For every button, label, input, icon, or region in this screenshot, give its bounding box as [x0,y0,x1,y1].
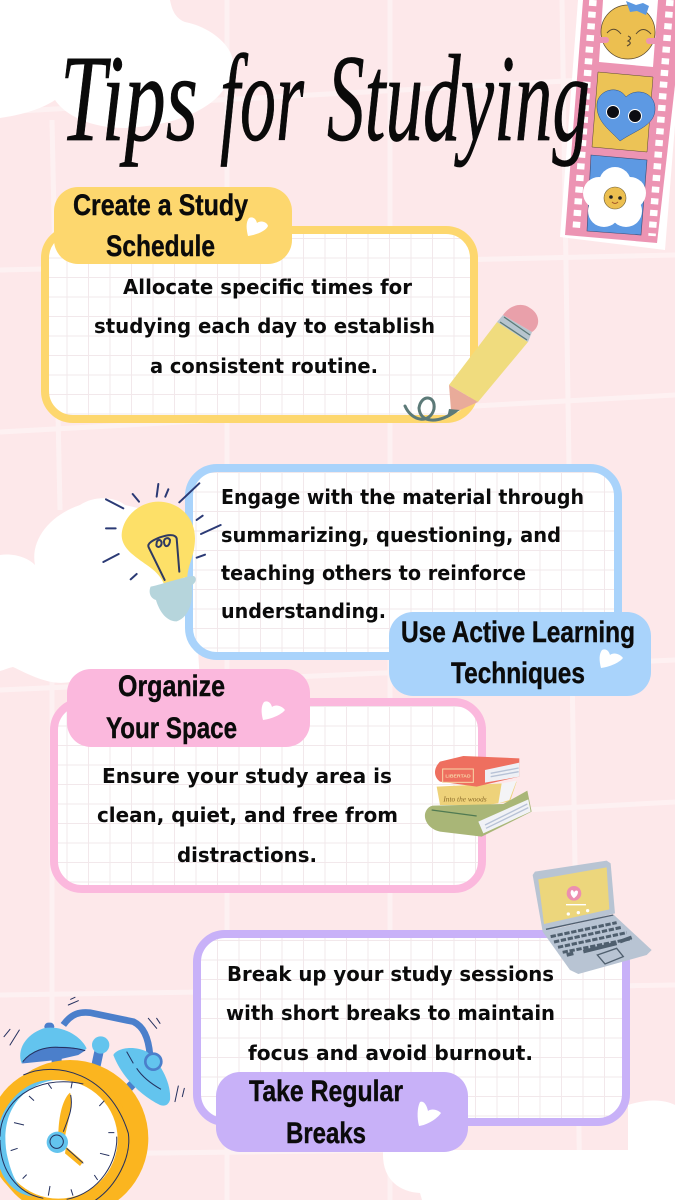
label: organize your space [67,669,310,747]
body text: teaching others to reinforce [221,561,526,585]
icon: stack of books [425,756,532,837]
body text: Engage with the material through [221,485,584,509]
body text: understanding. [221,599,386,623]
icon: alarm clock [0,997,184,1200]
sprocket holes [576,0,670,236]
icon: light bulb [103,483,221,621]
body text [221,485,584,623]
yellow book: Into the woods [442,794,487,803]
panel: organize your space [54,669,482,889]
cloud: top left [0,0,233,128]
panel: create a study schedule [45,187,474,419]
body text [97,764,398,867]
icon: pencil [405,305,538,420]
label: create a study schedule: Create a Study [73,189,248,222]
body text [226,962,555,1065]
film strip sticker [560,0,675,250]
panel: take regular breaks [197,934,626,1152]
body text: focus and avoid burnout. [248,1041,533,1065]
left bell [20,1023,87,1072]
body text: clean, quiet, and free from [97,803,398,827]
label: take regular breaks [216,1072,468,1152]
icon: laptop [533,861,652,974]
right bell [113,1048,170,1106]
body text: Ensure your study area is [102,764,392,788]
clock hands [47,1093,83,1166]
label: create a study schedule [54,187,292,264]
cloud: bottom right [383,1100,675,1200]
red book: LIBERTAD [445,774,471,780]
body text: a consistent routine. [150,354,378,378]
body text: studying each day to establish [94,314,435,338]
body text [94,275,435,378]
label: organize your space: Organize [118,670,225,703]
vibration marks [4,997,184,1102]
body text: Allocate specific times for [123,275,412,299]
body text: with short breaks to maintain [226,1001,555,1025]
body text: summarizing, questioning, and [221,523,561,547]
body text: distractions. [177,843,317,867]
label: use active learning techniques [389,612,651,696]
label: take regular breaks: Breaks [286,1117,366,1150]
label: take regular breaks: Take Regular [249,1075,403,1108]
title: for [220,30,304,167]
panel: active learning [189,468,651,696]
hour ticks [11,1082,114,1196]
green book [425,791,532,837]
frame: heart face [592,72,655,152]
frame: kissing face [597,0,658,67]
clock body [0,1060,148,1200]
clock handle [63,1012,150,1055]
label: create a study schedule: Schedule [106,230,215,263]
title [60,30,590,167]
label: use active learning techniques: Techniques [451,657,585,690]
cloud: middle left [0,498,200,683]
label: organize your space: Your Space [106,712,237,745]
title: Tips [60,30,198,167]
clapper [92,1036,109,1073]
frame: smiling flower [583,155,647,235]
body text: Break up your study sessions [227,962,554,986]
